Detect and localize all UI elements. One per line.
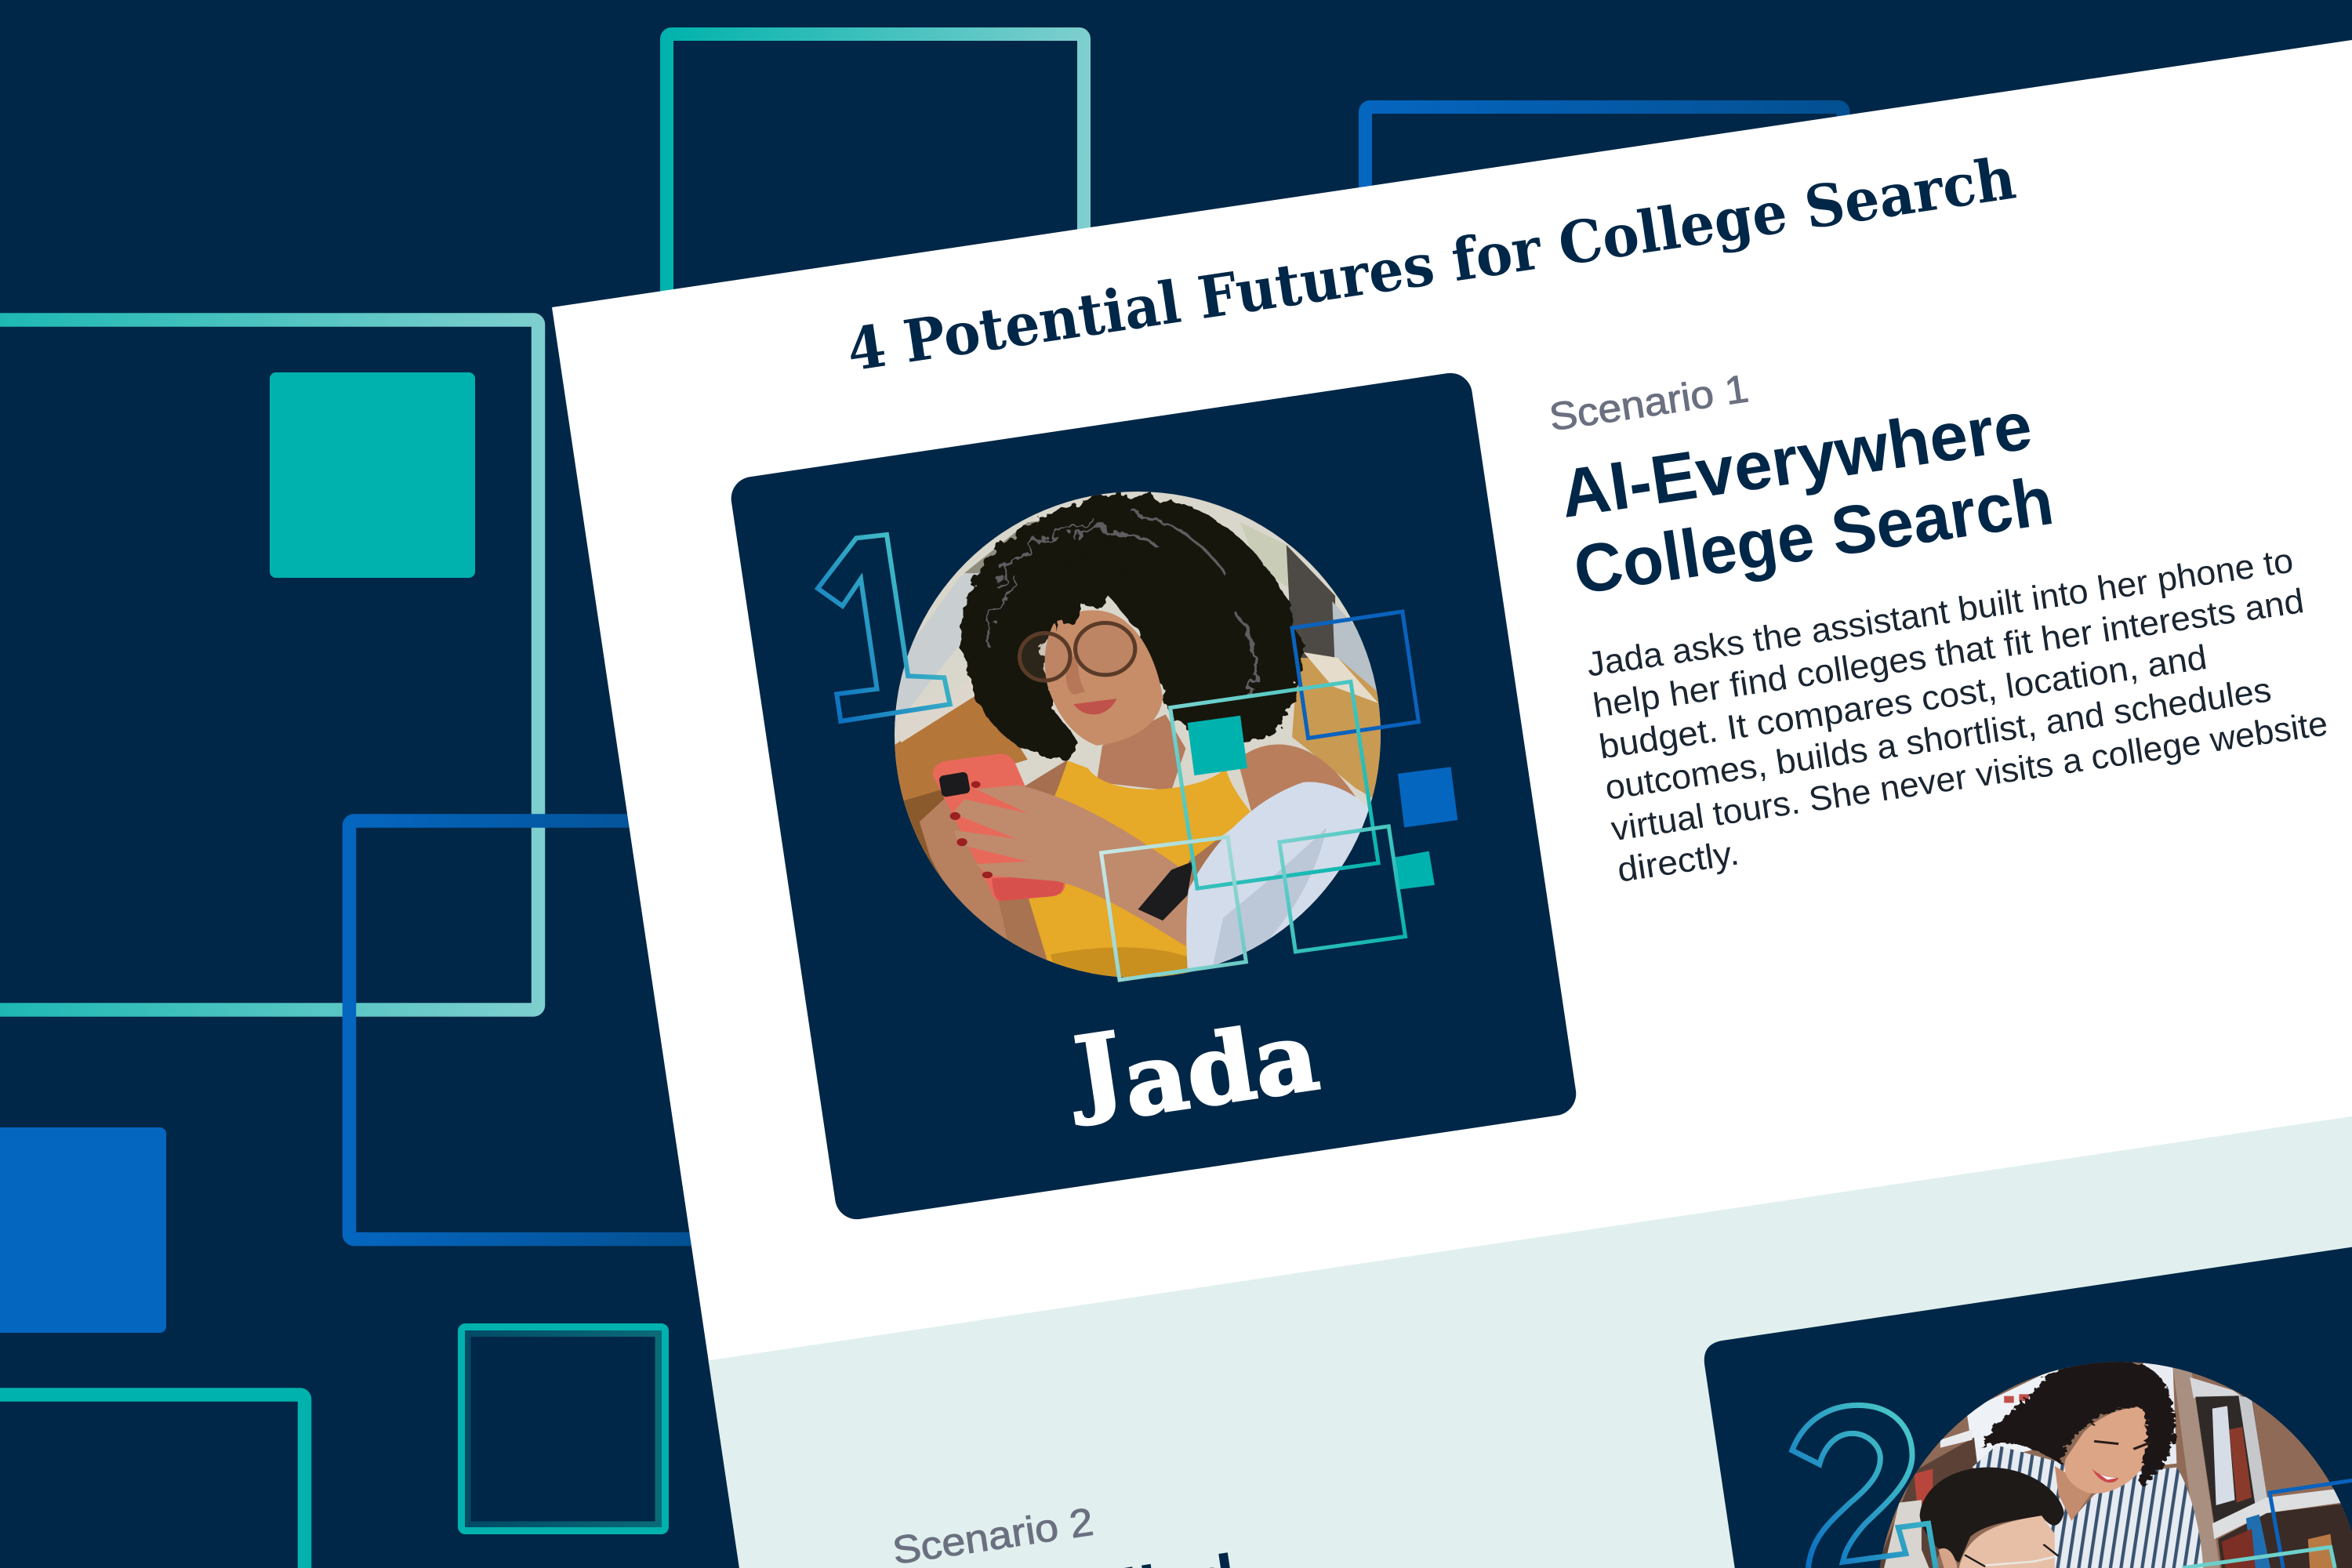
man hair and face: [1920, 1468, 2064, 1563]
scenario 1 body text: help her find colleges that fit her interests and: [1591, 582, 2307, 725]
outline square: large left: [0, 320, 538, 1010]
outline square blue: [1292, 612, 1418, 739]
filled blue square: [1398, 767, 1457, 827]
scenario 1 body text: Jada asks the assistant built into her phone to: [1584, 541, 2296, 684]
photo: Jada with phone: [895, 492, 1381, 977]
name: Jada: J: [1061, 1010, 1131, 1130]
name: Jada: ada: [1116, 999, 1325, 1139]
scenario 1 body text: virtual tours. She never visits a college website: [1609, 704, 2330, 848]
scenario 1 body text: [1584, 540, 2336, 890]
scenario 1 body text: outcomes, builds a shortlist, and schedules: [1602, 670, 2274, 808]
card 2 decorations: [1792, 1405, 2352, 1568]
panel: mint band: [709, 1116, 2352, 1568]
small teal square: [1395, 851, 1435, 890]
hair: [961, 495, 1302, 759]
scenario 1 heading: College Search: [1569, 463, 2058, 608]
outline square: top centre: [666, 34, 1083, 505]
hands and phone: [920, 797, 1045, 966]
outline square: small teal: [461, 1327, 665, 1530]
yellow top: [1028, 760, 1252, 983]
filled teal square: [1188, 716, 1247, 775]
filled blue square: [0, 1127, 166, 1333]
outline square mint: [1171, 681, 1378, 888]
scenario 1 heading: AI-Everywhere: [1555, 387, 2037, 532]
outline square: blue middle: [350, 821, 836, 1239]
outline square pale: [1102, 837, 1246, 980]
number 2 outline: [1792, 1405, 1936, 1568]
title: 4 Potential Futures for College Search: [843, 144, 2020, 385]
outline square teal: [1279, 826, 1406, 952]
woman hair: [1982, 1360, 2175, 1485]
photo: student and advisor: [1858, 1354, 2352, 1568]
grey trousers: [1186, 782, 1390, 989]
outline square blue: [2270, 1480, 2352, 1568]
panel: white sheet: [552, 40, 2352, 1568]
woman neck and face: [2055, 1466, 2094, 1521]
number 1 outline: [818, 535, 950, 721]
document text and card 1: [707, 111, 2352, 1568]
filled teal square: [270, 372, 475, 578]
card 1 background: [728, 370, 1579, 1222]
card 1 decorations: [818, 535, 1457, 980]
card 2 background: [1704, 1247, 2352, 1568]
scenario 1 body text: budget. It compares cost, location, and: [1596, 638, 2209, 767]
outline square: top right: [1366, 107, 1843, 499]
outline square mint: [2183, 1547, 2335, 1568]
scenario 1 body text: directly.: [1615, 833, 1741, 890]
face: [1045, 610, 1163, 746]
scenario 1 label: Scenario 1: [1546, 366, 1751, 439]
outline square: bottom left: [0, 1395, 304, 1568]
glasses: [1019, 622, 1135, 681]
scenario 1 heading: [1555, 386, 2058, 609]
striped shirt: [1973, 1445, 2203, 1568]
background squares: [0, 34, 1843, 1568]
